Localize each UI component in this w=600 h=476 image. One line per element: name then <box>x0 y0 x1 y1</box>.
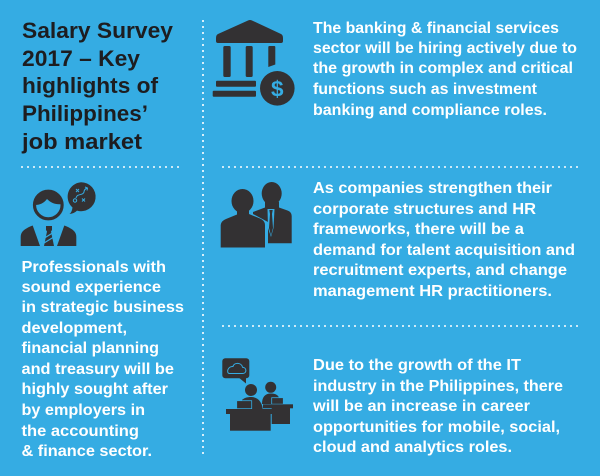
icon: two business people <box>221 182 292 248</box>
text: IT industry: cloud and analytics roles. <box>313 439 512 456</box>
icon: bank with dollar coin <box>213 20 295 106</box>
title: highlights of <box>22 73 159 98</box>
text: accounting and finance: highly sought after <box>22 381 168 398</box>
text: HR talent: frameworks, there will be a <box>313 221 524 238</box>
text: IT industry: Due to the growth of the IT <box>313 357 521 374</box>
text: banking and financial services: banking and compliance roles. <box>313 102 547 119</box>
text: banking and financial services: functions such as investment <box>313 81 538 98</box>
text: banking and financial services: the growth in complex and critical <box>313 60 573 77</box>
text: HR talent: recruitment experts, and change <box>313 262 567 279</box>
text: HR talent <box>313 180 575 300</box>
text: accounting and finance: by employers in <box>22 402 145 419</box>
icon: professional with strategy speech bubble <box>21 182 96 246</box>
text: accounting and finance: and treasury will be <box>22 361 174 378</box>
text: accounting and finance: the accounting <box>22 423 139 440</box>
text: accounting and finance <box>22 259 184 460</box>
text: banking and financial services: sector will be hiring actively due to <box>313 40 577 57</box>
text: HR talent: As companies strengthen their <box>313 180 552 197</box>
text: accounting and finance: development, <box>22 320 127 337</box>
text: IT industry: will be an increase in career <box>312 398 530 415</box>
title: Philippines’ <box>22 101 148 126</box>
icon: IT workers with cloud bubble <box>222 358 293 431</box>
text: IT industry: opportunities for mobile, social, <box>313 419 560 436</box>
icon: bank with dollar coin: $ <box>271 76 284 102</box>
text: accounting and finance: & finance sector. <box>22 443 152 460</box>
title <box>21 18 173 154</box>
text: accounting and finance: in strategic business <box>22 299 184 316</box>
text: accounting and finance: Professionals with <box>22 259 166 276</box>
title: job market <box>21 129 143 154</box>
text: IT industry: industry in the Philippines, there <box>313 378 563 395</box>
title: Salary Survey <box>22 18 173 43</box>
text: HR talent: demand for talent acquisition and <box>313 242 575 259</box>
text: HR talent: management HR practitioners. <box>313 283 552 300</box>
text: HR talent: corporate structures and HR <box>313 201 537 218</box>
text: accounting and finance: sound experience <box>22 279 161 296</box>
text: IT industry <box>312 357 563 456</box>
title: 2017 – Key <box>22 46 140 71</box>
text: banking and financial services <box>313 20 577 119</box>
text: accounting and finance: financial planning <box>22 340 159 357</box>
text: banking and financial services: The banking & financial services <box>313 20 559 37</box>
